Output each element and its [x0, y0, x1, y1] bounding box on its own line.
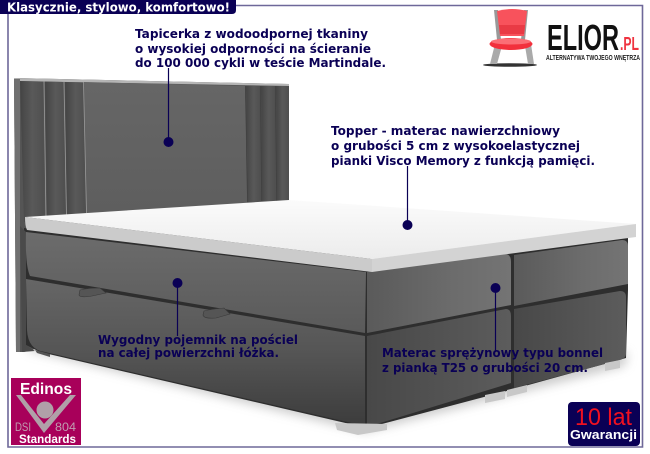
base left side [20, 226, 366, 426]
callout: storage [98, 278, 298, 360]
logo: Elior [483, 9, 640, 67]
icon: red chair [483, 9, 537, 67]
callout: upholstery [135, 27, 386, 147]
callout: mattress: z pianką T25 o grubości 20 cm. [382, 361, 588, 375]
callout: upholstery: Tapicerka z wodoodpornej tkaniny [135, 27, 368, 41]
base backing [24, 228, 628, 428]
badge: Edinos DSI 804 Standards: DSI [15, 420, 31, 434]
callout: topper [331, 124, 595, 230]
handles [79, 288, 230, 318]
badge: 10 lat Gwarancji: 10 lat [575, 404, 632, 431]
badge: 10 lat Gwarancji [568, 402, 640, 446]
callout: mattress: Materac sprężynowy typu bonnel [382, 346, 603, 360]
floor shadow [26, 340, 628, 432]
headboard [14, 78, 372, 352]
feet [35, 350, 620, 435]
badge: Edinos DSI 804 Standards [11, 378, 81, 446]
callout: storage: Wygodny pojemnik na pościel [98, 333, 298, 347]
badge: Edinos DSI 804 Standards: 804 [55, 420, 76, 434]
badge: Edinos DSI 804 Standards: Edinos [20, 381, 72, 398]
callout: storage: na całej powierzchni łóżka. [98, 346, 279, 360]
base right side [367, 240, 628, 427]
callout: topper: o grubości 5 cm z wysokoelastycznej [331, 139, 580, 153]
callout: mattress [382, 283, 603, 375]
logo: Elior: .PL [620, 34, 639, 54]
badge: Edinos DSI 804 Standards: Standards [19, 432, 76, 446]
callout: topper: Topper - materac nawierzchniowy [331, 124, 560, 138]
bed illustration [14, 78, 636, 435]
callout: topper: pianki Visco Memory z funkcją pamięci. [331, 154, 595, 168]
callout: upholstery: do 100 000 cykli w teście Martindale. [135, 56, 386, 70]
callout: upholstery: o wysokiej odporności na ścieranie [135, 42, 371, 56]
topper mattress [25, 200, 636, 272]
badge: 10 lat Gwarancji: Gwarancji [570, 427, 637, 442]
